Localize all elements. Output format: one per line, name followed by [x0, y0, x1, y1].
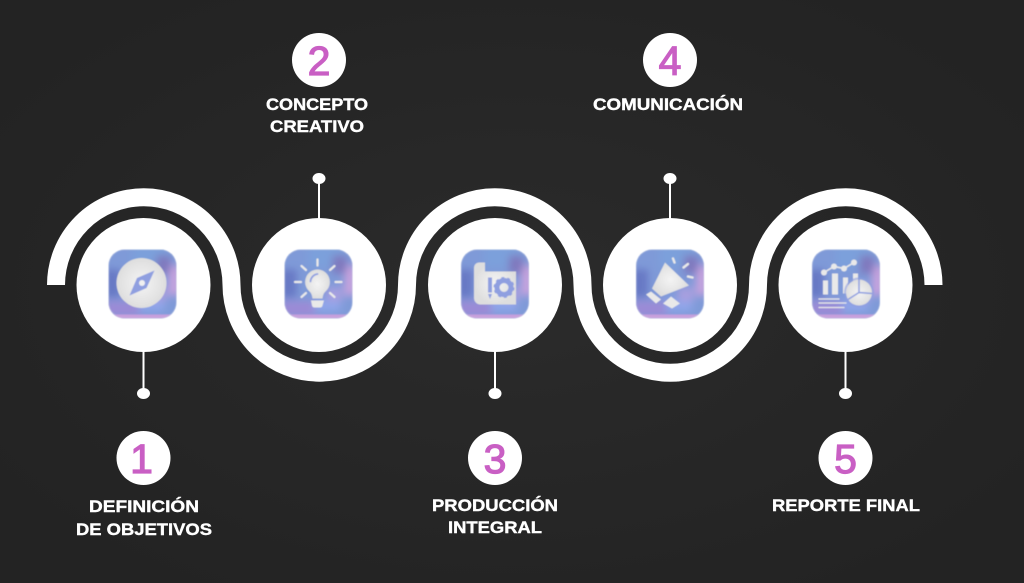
node circle 5: [778, 218, 912, 352]
number 1: 1: [130, 436, 153, 482]
icon: compass: [104, 246, 180, 318]
step 5: [772, 218, 920, 515]
icon: light bulb: [280, 246, 356, 318]
connector 1: [137, 345, 150, 399]
connector 3: [488, 345, 502, 399]
connector 4: [664, 173, 676, 224]
step 1: [76, 218, 212, 539]
number 5: [818, 431, 872, 485]
node circle 4: [603, 218, 737, 352]
label 1: DE OBJETIVOS: [76, 520, 212, 539]
step 3: [428, 218, 562, 537]
label 2: CONCEPTO: [266, 95, 368, 114]
step 4: [593, 33, 743, 352]
number 4: [643, 33, 697, 87]
label 4: COMUNICACIÓN: [593, 95, 743, 114]
number 5: 5: [834, 436, 857, 482]
label 5: REPORTE FINAL: [772, 496, 920, 515]
label 1: DEFINICIÓN: [89, 497, 199, 516]
label 3: INTEGRAL: [448, 518, 542, 537]
step 2: [252, 33, 386, 352]
number 3: 3: [484, 436, 506, 482]
icon: report chart: [808, 246, 884, 318]
connector 5: [839, 345, 852, 399]
label 3: [432, 496, 558, 537]
label 3: PRODUCCIÓN: [432, 496, 558, 515]
number 3: [468, 431, 522, 485]
number 4: 4: [659, 38, 681, 84]
number 2: 2: [308, 38, 330, 84]
number 1: [116, 431, 170, 485]
connector 2: [312, 173, 326, 224]
serpentine ribbon: [56, 197, 934, 373]
label 1: [76, 497, 212, 539]
node circle 1: [76, 218, 210, 352]
icon: blueprint: [457, 246, 533, 318]
label 2: CREATIVO: [270, 117, 364, 136]
number 2: [292, 33, 346, 87]
icon: megaphone: [632, 246, 708, 318]
node circle 3: [428, 218, 562, 352]
node circle 2: [252, 218, 386, 352]
label 2: [266, 95, 368, 136]
